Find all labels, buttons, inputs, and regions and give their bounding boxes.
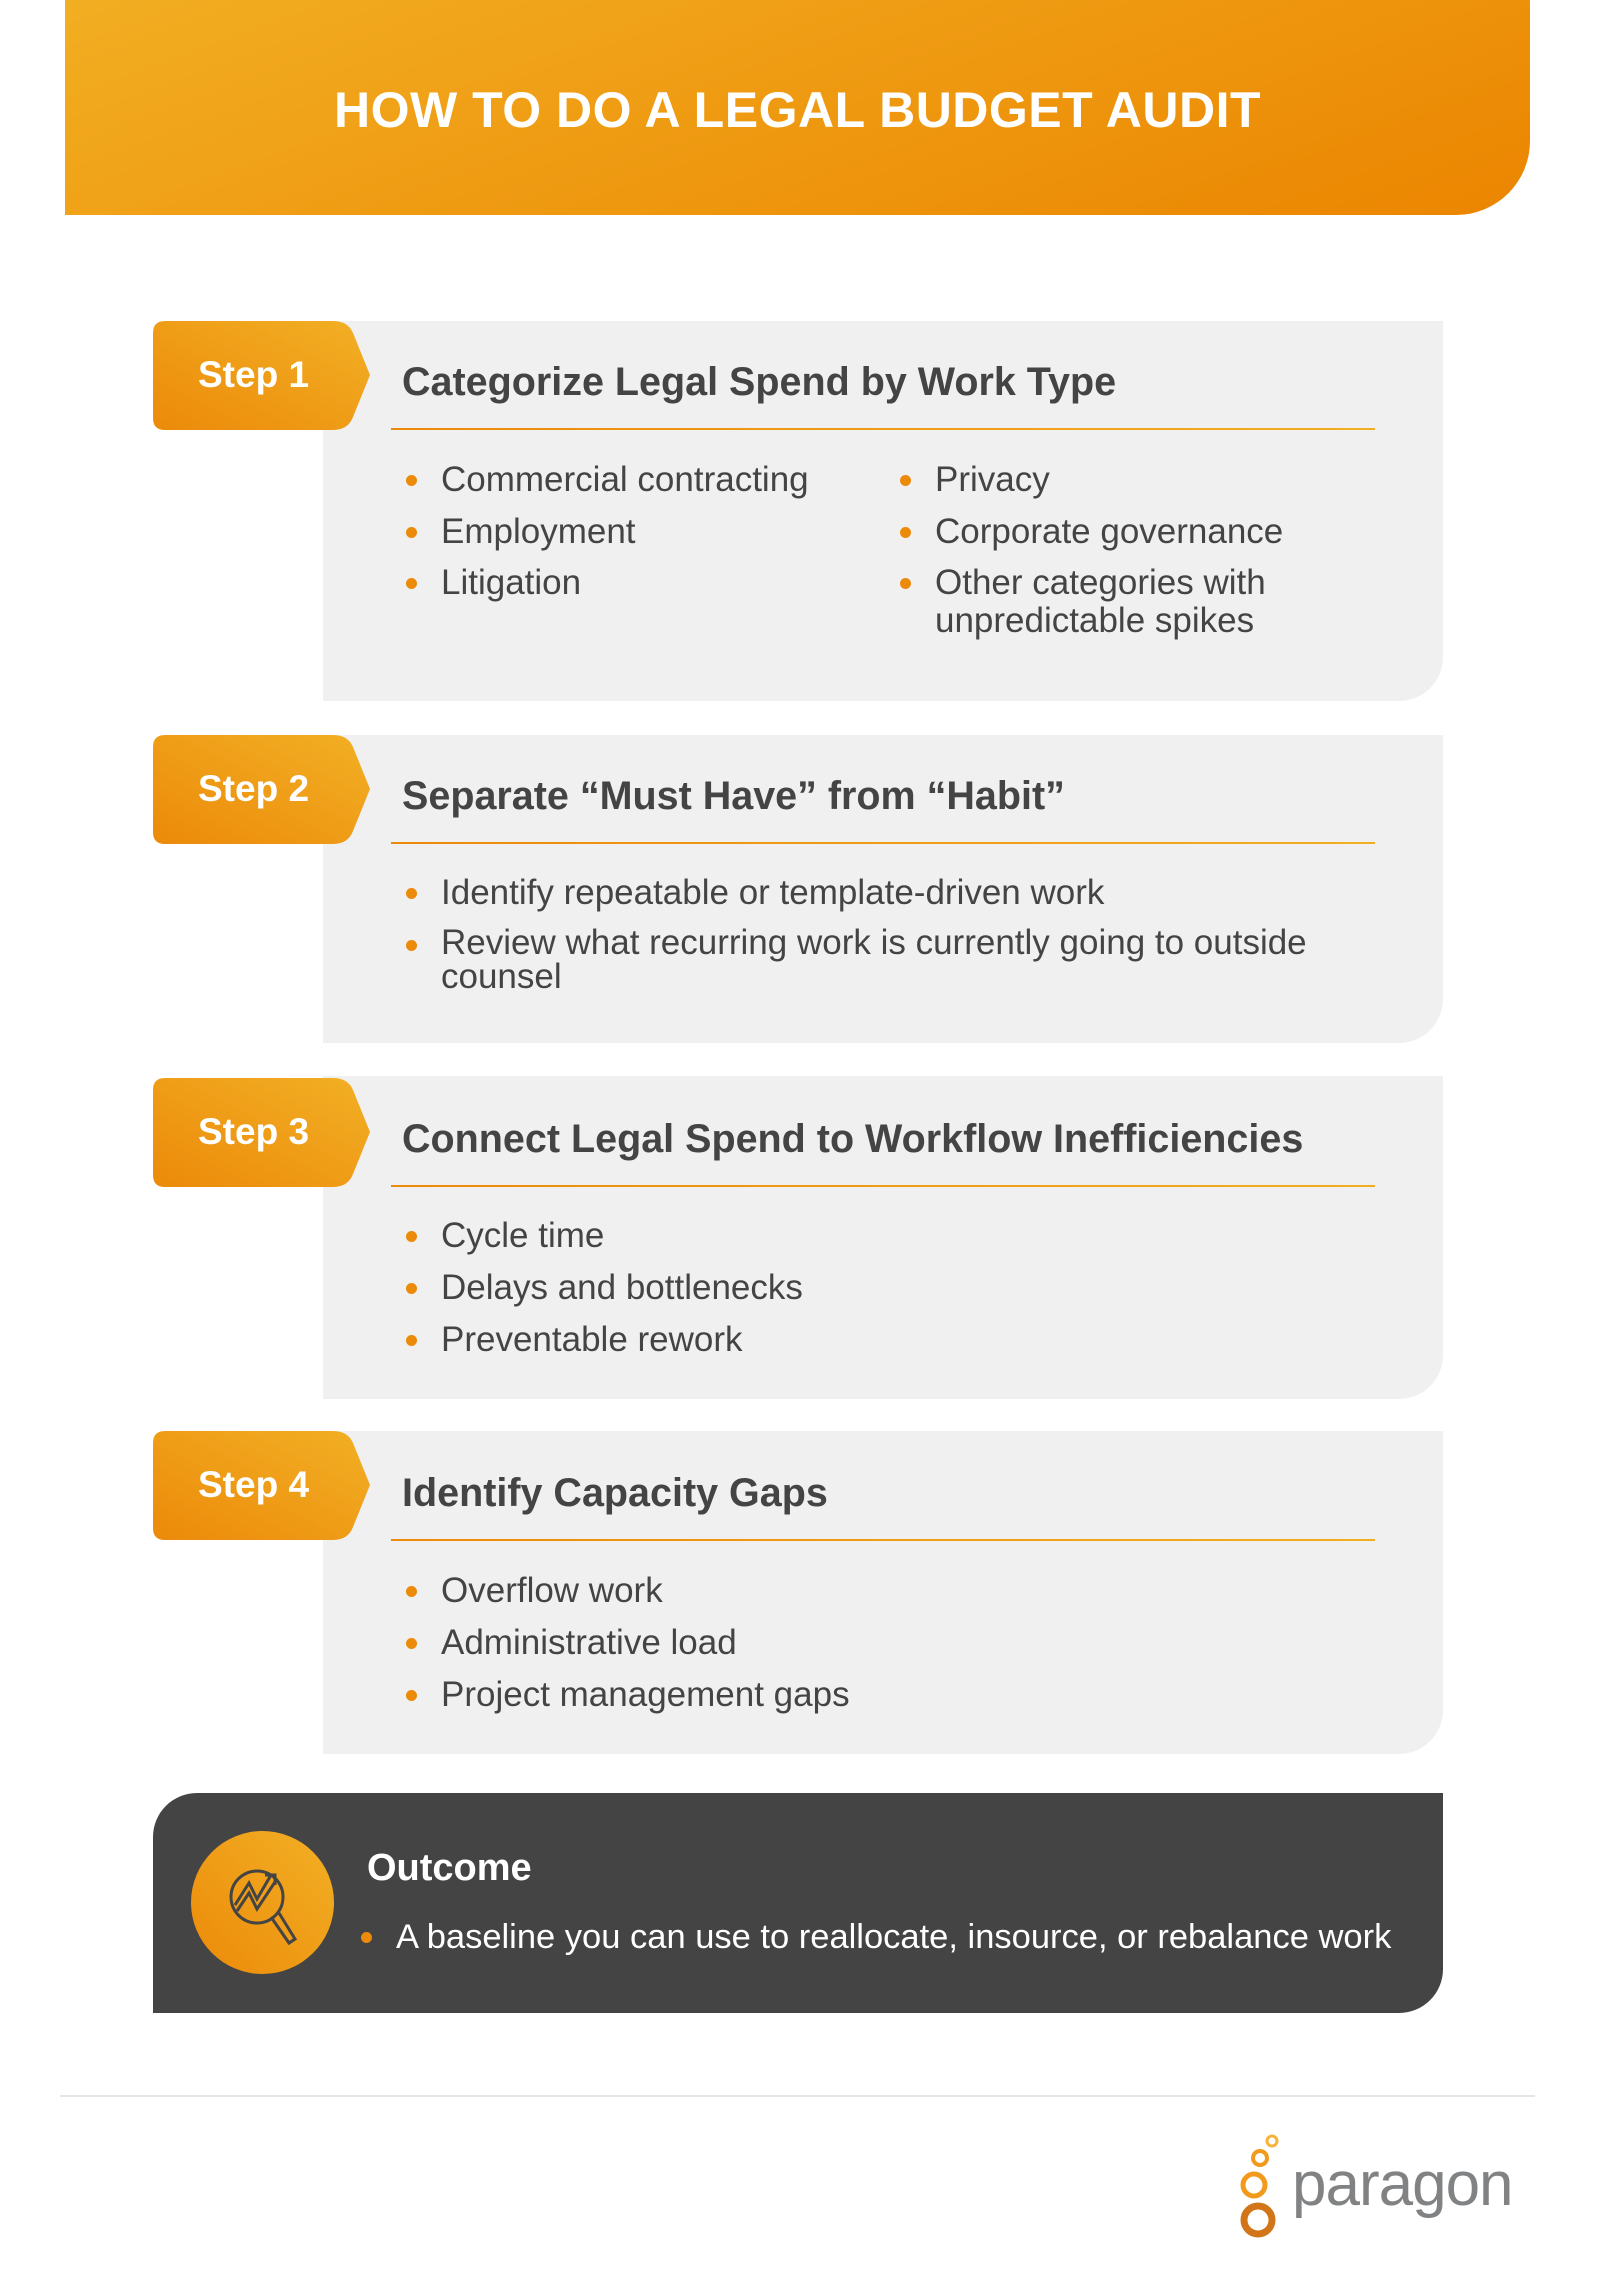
panel: step 2 (323, 735, 1443, 1043)
panel: step 3 (323, 1076, 1443, 1399)
heading: step 2: Separate “Must Have” from “Habit” (402, 774, 1065, 818)
bullets: step 1: Privacy (935, 460, 1050, 499)
outcome heading: Outcome (367, 1847, 532, 1889)
bullets: step 4: Project management gaps (441, 1675, 850, 1714)
panel: outcome (153, 1793, 1443, 2013)
tag: step 3 (153, 1078, 370, 1187)
tag: step 1 (153, 321, 370, 430)
bullets: step 4: Administrative load (441, 1623, 737, 1662)
bullets: step 3: Delays and bottlenecks (441, 1268, 803, 1307)
bullets: step 1: Other categories with (935, 563, 1266, 602)
title: HOW TO DO A LEGAL BUDGET AUDIT (334, 82, 1261, 138)
bullets: step 1: Commercial contracting (441, 460, 809, 499)
panel: step 4 (323, 1431, 1443, 1754)
bullets: step 3 (406, 1216, 803, 1359)
tag: step 4 (153, 1431, 370, 1540)
bullets: step 4: Overflow work (441, 1571, 663, 1610)
panel: step 1 (323, 321, 1443, 701)
bullets: step 2: counsel (441, 957, 562, 996)
bullets: step 2: Identify repeatable or template-driven work (441, 873, 1104, 912)
icon: chart magnifier (191, 1831, 334, 1974)
heading: step 1: Categorize Legal Spend by Work Type (402, 360, 1116, 404)
bullets: step 3: Cycle time (441, 1216, 604, 1255)
bullets: step 2 (406, 873, 1307, 996)
logo: paragon: paragon (1292, 2150, 1513, 2219)
tag: step 3: Step 3 (198, 1111, 309, 1152)
bullets: step 3: Preventable rework (441, 1320, 743, 1359)
tag: step 2 (153, 735, 370, 844)
bullets: step 1 (406, 460, 1283, 640)
heading: step 4: Identify Capacity Gaps (402, 1471, 828, 1515)
heading: step 3: Connect Legal Spend to Workflow Inefficiencies (402, 1117, 1303, 1161)
bullets: step 2: Review what recurring work is currently going to outside (441, 923, 1307, 962)
outcome text: A baseline you can use to reallocate, insource, or rebalance work (396, 1918, 1391, 1956)
header banner (65, 0, 1530, 215)
logo: paragon (1240, 2134, 1513, 2238)
bullets: step 4 (406, 1571, 850, 1714)
bullets: step 1: unpredictable spikes (935, 601, 1254, 640)
bullets: step 1: Corporate governance (935, 512, 1283, 551)
tag: step 1: Step 1 (198, 354, 309, 395)
bullets: step 1: Litigation (441, 563, 581, 602)
bullets: step 1: Employment (441, 512, 636, 551)
tag: step 4: Step 4 (198, 1464, 309, 1505)
tag: step 2: Step 2 (198, 768, 309, 809)
